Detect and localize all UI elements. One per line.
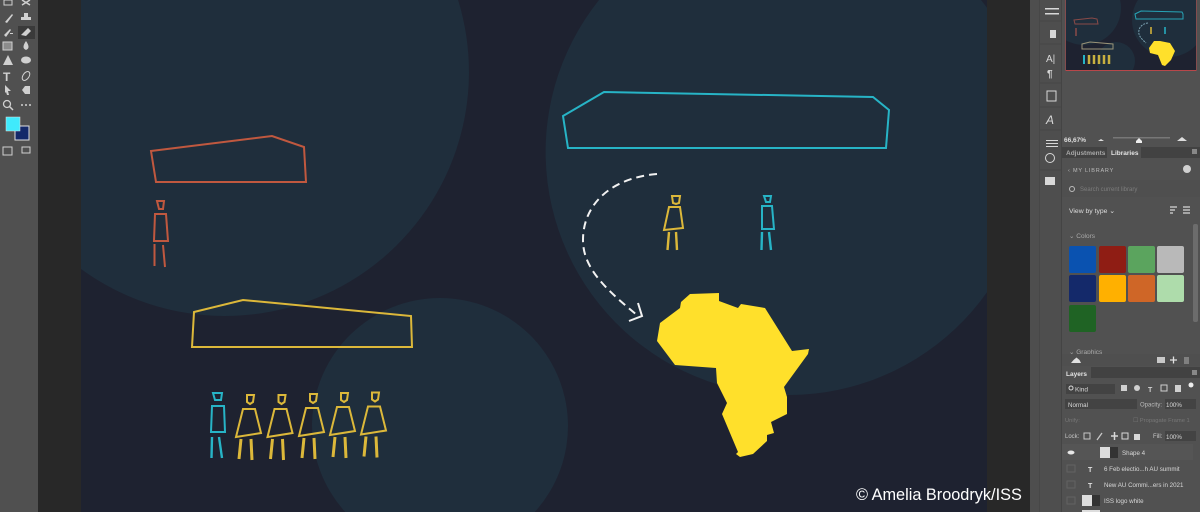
library footer icons <box>1062 354 1200 366</box>
layer filter row <box>1066 382 1194 394</box>
layers tab: Layers <box>1066 371 1087 378</box>
yellow figure 2 <box>268 395 292 460</box>
view by type control: View by type ⌄ <box>1069 208 1115 215</box>
layer: Shape 4: Shape 4 <box>1122 450 1146 457</box>
yellow figure 1 <box>236 395 261 460</box>
yellow table outline <box>192 300 412 347</box>
layer: 6 Feb election text: T <box>1088 467 1093 474</box>
blend mode row: Normal <box>1068 402 1088 409</box>
background circle: top right <box>546 0 987 395</box>
arrow: dashed curve to Africa <box>583 174 657 321</box>
layers tab <box>1062 367 1200 378</box>
panel tabs: Adjustments, Libraries: Libraries <box>1111 150 1139 157</box>
view by type control <box>1069 207 1190 215</box>
layer filter row: Kind <box>1075 386 1088 394</box>
dock icons <box>1045 8 1059 185</box>
tool icons <box>3 0 31 155</box>
yellow figure 5 <box>361 392 386 458</box>
lock row <box>1065 431 1196 441</box>
navigator thumbnail <box>1066 0 1196 71</box>
yellow figure 3 <box>299 394 324 459</box>
foreground colour swatch <box>6 117 20 131</box>
panel: right side dock and panels <box>1030 0 1200 512</box>
layer: Shape 4 <box>1062 444 1193 460</box>
dock icons: A <box>1045 113 1054 127</box>
lock row: 100% <box>1166 434 1182 441</box>
red standing figure <box>154 201 168 267</box>
dock icons: ¶ <box>1047 69 1053 80</box>
library header <box>1068 165 1191 174</box>
copyright credit: © Amelia Broodryk/ISS <box>856 486 1022 504</box>
teal standing figure <box>762 196 774 250</box>
panel: artwork canvas <box>81 0 987 512</box>
zoom slider row: 66,67% <box>1064 137 1086 144</box>
layer: 6 Feb election text <box>1067 465 1180 474</box>
blend mode row: Opacity: <box>1140 402 1162 408</box>
layer: New AU Commissioners text: T <box>1088 483 1093 490</box>
panel tabs: Adjustments, Libraries <box>1062 147 1200 158</box>
layer: ISS logo white: ISS logo white <box>1104 498 1144 505</box>
blend mode row <box>1065 399 1196 409</box>
colour swatches <box>1069 246 1184 332</box>
background circle: bottom centre <box>312 298 568 512</box>
layer: next row thumbnail <box>1082 510 1100 512</box>
yellow standing figure <box>664 196 683 250</box>
zoom slider row <box>1064 137 1187 144</box>
panel: left toolbar <box>0 0 38 512</box>
graphics heading: ⌄ Graphics <box>1069 349 1103 356</box>
unify row: Unify: <box>1065 418 1080 424</box>
blend mode row: 100% <box>1166 402 1182 409</box>
panel tabs: Adjustments, Libraries: Adjustments <box>1066 150 1106 157</box>
tool icons: T <box>3 70 11 84</box>
layer: 6 Feb election text: 6 Feb electio...h AU summit <box>1104 466 1180 473</box>
unify row <box>1065 417 1190 424</box>
yellow figure 4 <box>330 393 355 458</box>
active tool highlight <box>18 26 35 39</box>
row of six figures: one teal, five yellow <box>211 392 386 460</box>
teal figure in row <box>211 393 225 458</box>
background circle: top left <box>81 0 469 316</box>
lock row: Lock: <box>1065 434 1080 440</box>
dock icons: A| <box>1046 54 1055 65</box>
search bar: Search current library <box>1080 187 1137 193</box>
background colour swatch <box>15 126 29 140</box>
layer filter row: T <box>1148 387 1153 394</box>
search bar <box>1062 180 1200 197</box>
scrollbar <box>1193 224 1198 322</box>
lock row: Fill: <box>1153 434 1163 440</box>
layer: New AU Commissioners text <box>1067 481 1184 490</box>
layer: ISS logo white <box>1067 495 1144 506</box>
library header: ‹ MY LIBRARY <box>1068 168 1114 174</box>
map: Africa <box>657 293 809 457</box>
teal table outline <box>563 92 889 148</box>
layer: New AU Commissioners text: New AU Commi...ers in 2021 <box>1104 482 1184 489</box>
unify row: ☐ Propagate Frame 1 <box>1133 417 1190 424</box>
red table outline <box>151 136 306 182</box>
colors heading: ⌄ Colors <box>1069 233 1096 240</box>
